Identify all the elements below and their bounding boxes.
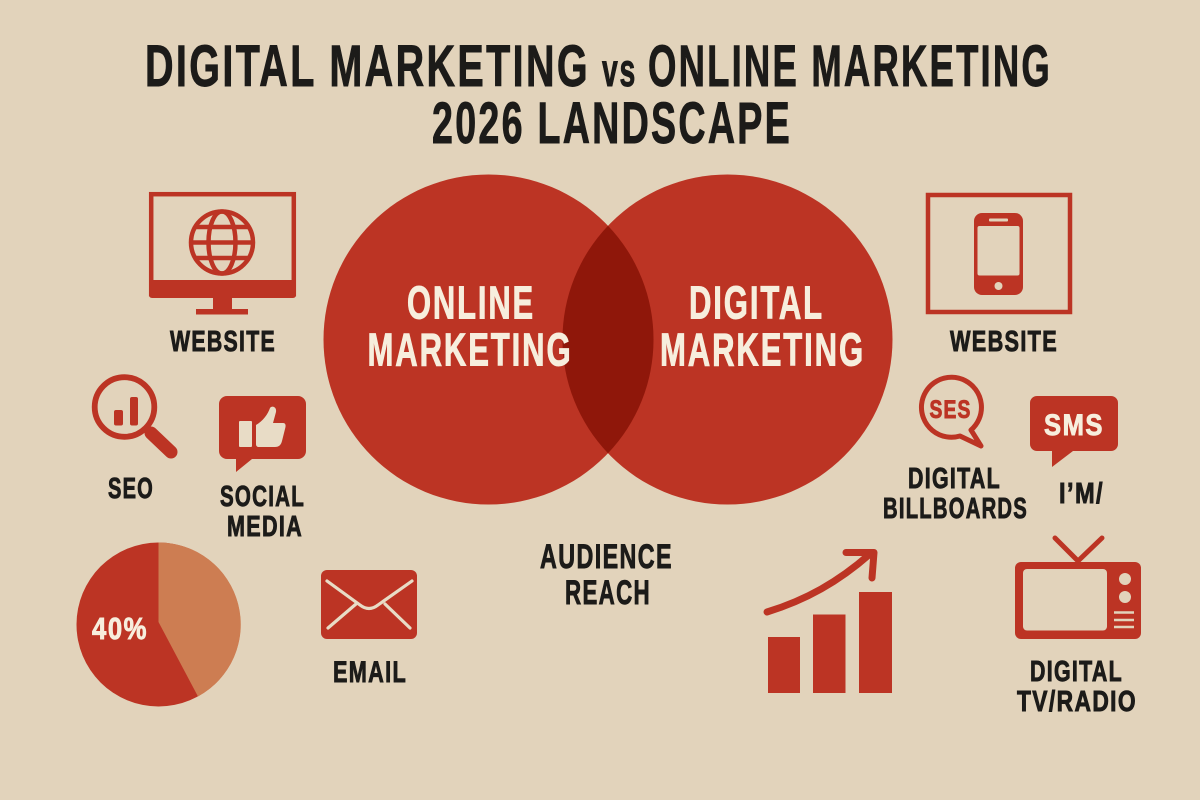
- label: social media: [220, 481, 305, 543]
- venn diagram: [324, 174, 892, 504]
- title: [145, 34, 1052, 156]
- label: audience reach: REACH: [565, 574, 651, 612]
- icon: monitor with globe: [149, 194, 296, 314]
- chart: growth bars with arrow: [767, 552, 892, 693]
- digital marketing label: MARKETING: [660, 324, 865, 376]
- title: 2026 LANDSCAPE: [432, 91, 792, 156]
- label: I'M/: I’M/: [1059, 478, 1104, 510]
- online marketing label: MARKETING: [368, 324, 572, 376]
- icon: sms bubble: SMS: [1044, 409, 1104, 442]
- chart: pie 40%: 40%: [92, 611, 148, 646]
- icon: phone in frame: [928, 195, 1070, 312]
- title: vs: [602, 44, 637, 96]
- label: digital billboards: DIGITAL: [908, 463, 1001, 495]
- title: DIGITAL MARKETING: [145, 34, 590, 99]
- icon: sms bubble: [1030, 396, 1118, 467]
- label: digital billboards: [883, 463, 1028, 525]
- label: digital tv/radio: [1017, 656, 1137, 718]
- label: social media: SOCIAL: [220, 481, 305, 513]
- icon: television: [1015, 538, 1141, 639]
- icon: ses speech bubble: SES: [930, 396, 972, 424]
- icon: email envelope: [321, 570, 417, 639]
- label: seo: SEO: [108, 473, 154, 505]
- chart: pie 40%: [76, 542, 241, 706]
- digital marketing label: DIGITAL: [689, 276, 824, 328]
- label: digital tv/radio: DIGITAL: [1030, 656, 1123, 688]
- icon: social media thumbs up: [219, 396, 306, 472]
- label: digital tv/radio: TV/RADIO: [1017, 686, 1137, 718]
- icon: ses speech bubble: [921, 377, 981, 446]
- label: website right: WEBSITE: [950, 326, 1058, 358]
- label: website left: WEBSITE: [170, 326, 276, 358]
- label: social media: MEDIA: [227, 511, 303, 543]
- label: audience reach: AUDIENCE: [540, 538, 673, 576]
- icon: seo magnifier: [95, 377, 171, 452]
- online marketing label: [368, 276, 572, 376]
- digital marketing label: [660, 276, 865, 376]
- label: audience reach: [540, 538, 673, 612]
- label: digital billboards: BILLBOARDS: [883, 493, 1028, 525]
- label: email: EMAIL: [333, 656, 407, 689]
- online marketing label: ONLINE: [407, 276, 535, 328]
